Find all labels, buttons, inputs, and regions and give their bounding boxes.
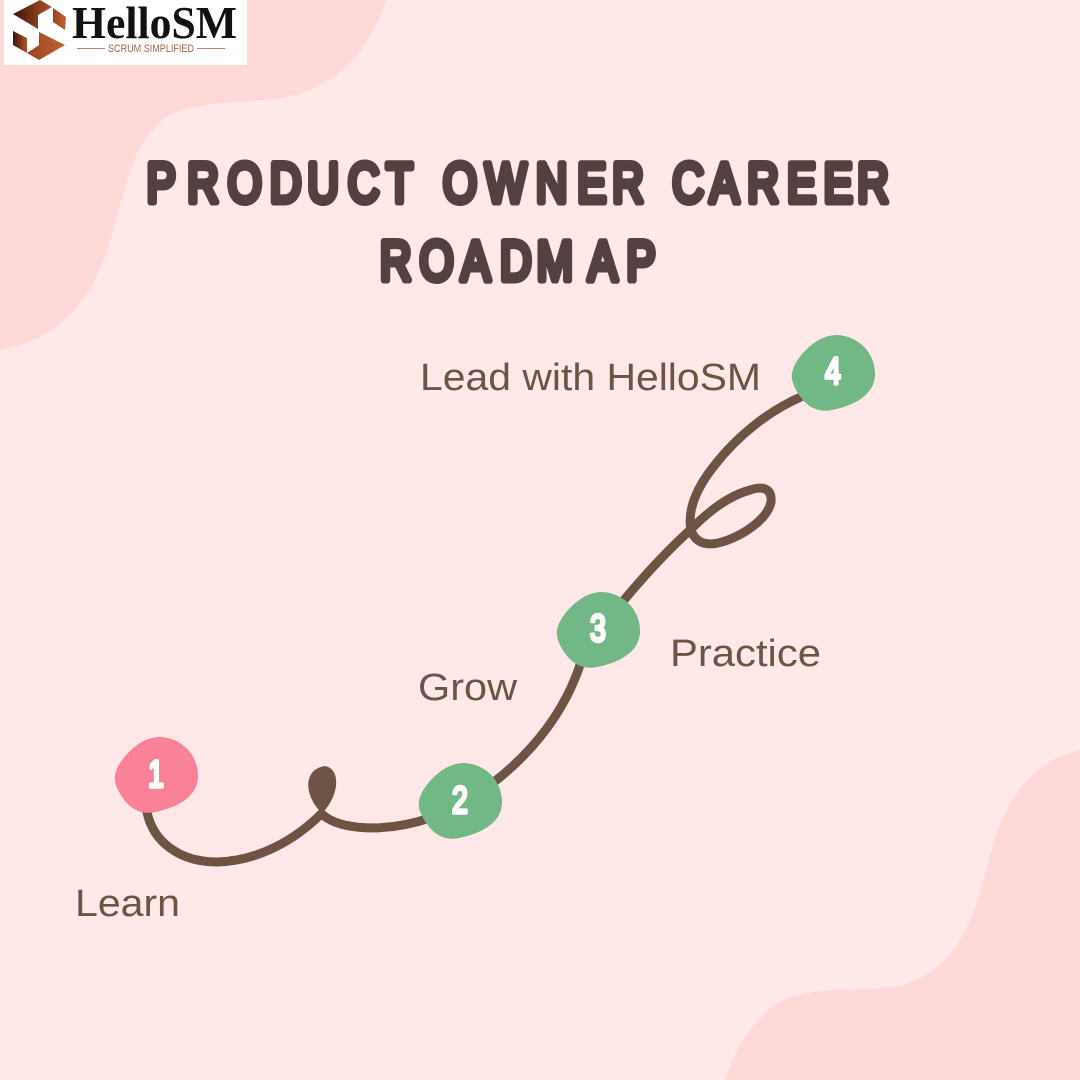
step 3 marker: 3 [590,608,606,650]
label: Practice: Practice [670,633,821,675]
step 3 marker [557,592,640,668]
logo [4,0,247,65]
step 2 marker: 2 [452,780,468,822]
label: Grow: Grow [418,667,518,709]
step 4 marker [792,335,875,411]
step 1 marker [115,737,198,813]
label: Lead with HelloSM: Lead with HelloSM [420,357,761,399]
small filled loop [309,767,335,812]
step 4 marker: 4 [825,351,841,393]
step 2 marker [419,763,502,839]
roadmap path [147,396,803,862]
title: PRODUCT OWNER CAREER [147,152,889,214]
logo tagline: SCRUM SIMPLIFIED [108,43,194,55]
logo icon [13,0,66,60]
step 1 marker: 1 [148,754,164,796]
label: Learn: Learn [75,883,180,925]
background blob: top left [0,0,386,350]
title: ROADMAP [380,230,655,292]
background blob: bottom right [725,750,1080,1080]
title [147,152,889,292]
